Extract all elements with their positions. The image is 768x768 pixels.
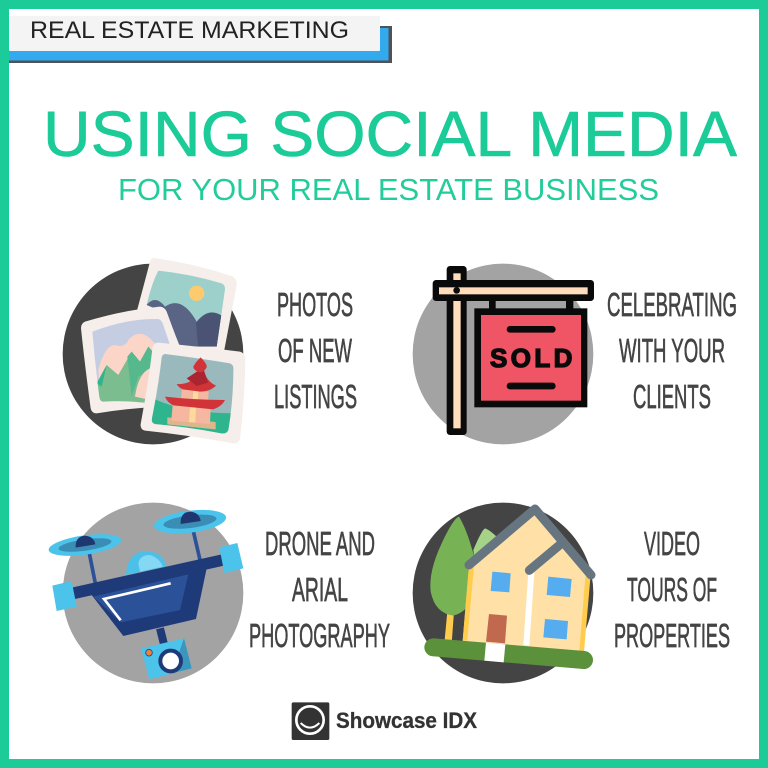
icon: house — [413, 503, 593, 683]
logo: Showcase IDX — [292, 702, 477, 740]
pagoda — [165, 357, 225, 429]
label: photos — [274, 287, 357, 416]
icon: sold sign: SOLD — [490, 343, 572, 373]
logo wordmark: Showcase IDX — [336, 708, 477, 733]
label: video: VIDEO — [644, 526, 700, 563]
logo mark — [292, 702, 329, 740]
icon: drone — [47, 503, 243, 683]
label: photos: LISTINGS — [274, 379, 357, 416]
label: celebrating — [607, 287, 737, 416]
label: drone — [249, 526, 390, 655]
icon: sold sign — [413, 264, 594, 444]
category banner — [9, 16, 392, 63]
label: drone: ARIAL — [292, 572, 348, 609]
label: drone: PHOTOGRAPHY — [249, 618, 390, 655]
title: USING SOCIAL MEDIA — [43, 98, 737, 170]
subtitle: FOR YOUR REAL ESTATE BUSINESS — [118, 172, 659, 207]
icon: photos — [63, 258, 245, 444]
label: photos: OF NEW — [278, 333, 352, 370]
banner text: REAL ESTATE MARKETING — [30, 17, 349, 44]
label: video — [614, 526, 730, 655]
label: photos: PHOTOS — [277, 287, 353, 324]
label: drone: DRONE AND — [265, 526, 375, 563]
